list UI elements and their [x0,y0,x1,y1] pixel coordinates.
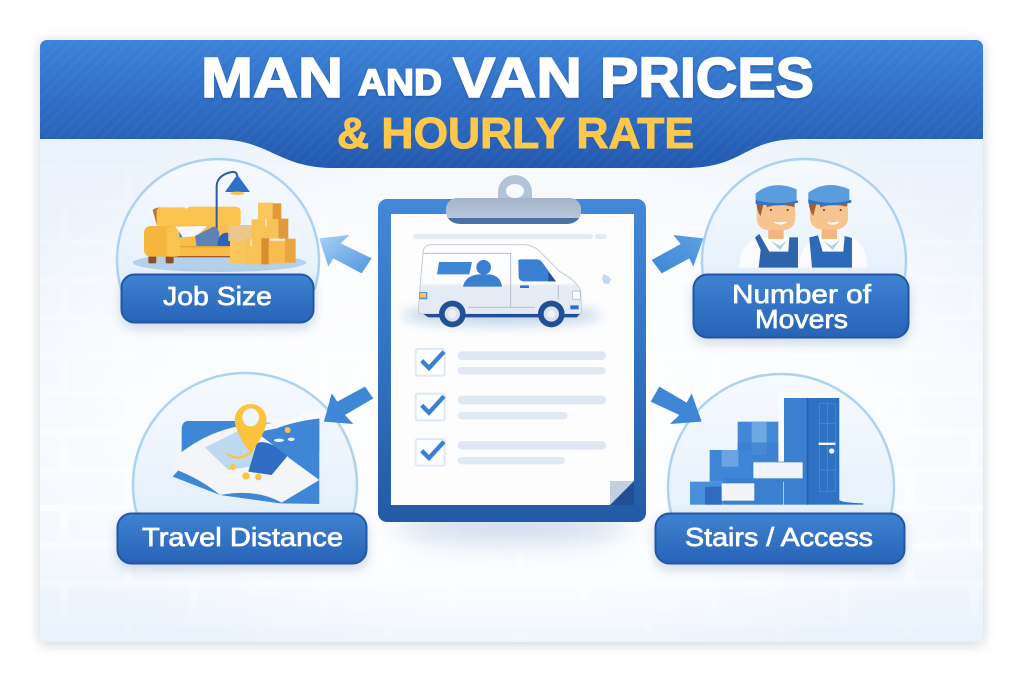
panel: number of movers [694,159,908,363]
title: AND [358,62,442,103]
arrow: to stairs [651,387,702,424]
clipboard [378,175,646,542]
title: & HOURLY RATE [337,109,694,158]
travel circle [132,372,358,513]
checklist [416,349,606,466]
panel: stairs and access [656,374,904,600]
movers label: Movers [755,304,848,334]
clipboard paper [391,214,634,505]
job size circle [116,158,320,290]
checklist row 1 [416,349,606,376]
stairs circle [666,372,896,513]
header banner [40,40,983,168]
movers label: Number of [732,279,872,309]
icon: map with pin [173,404,322,504]
panel: job size [116,158,320,333]
travel label [118,514,366,564]
van illustration [402,245,611,327]
travel label: Travel Distance [142,522,343,552]
job size label [122,274,314,322]
title: PRICES [600,46,814,110]
icon: two movers [739,185,867,268]
checklist row 2 [416,394,606,420]
title: VAN [453,46,582,110]
job size label: Job Size [163,281,272,311]
stairs label [656,514,904,564]
arrow: to movers [652,235,703,273]
movers circle [700,158,908,278]
title: MAN [201,46,343,110]
clipboard clip [446,175,581,224]
title [201,46,814,158]
arrow: to job size [319,235,372,273]
icon: stairs and door [690,393,863,505]
stairs label: Stairs / Access [685,522,873,552]
movers label [694,274,908,338]
arrow: to travel distance [324,387,373,424]
panel: travel distance [118,373,366,597]
top text line [413,234,607,239]
icon: sofa, lamp and boxes [133,172,306,272]
checklist row 3 [416,439,606,466]
clipboard board [378,199,646,522]
